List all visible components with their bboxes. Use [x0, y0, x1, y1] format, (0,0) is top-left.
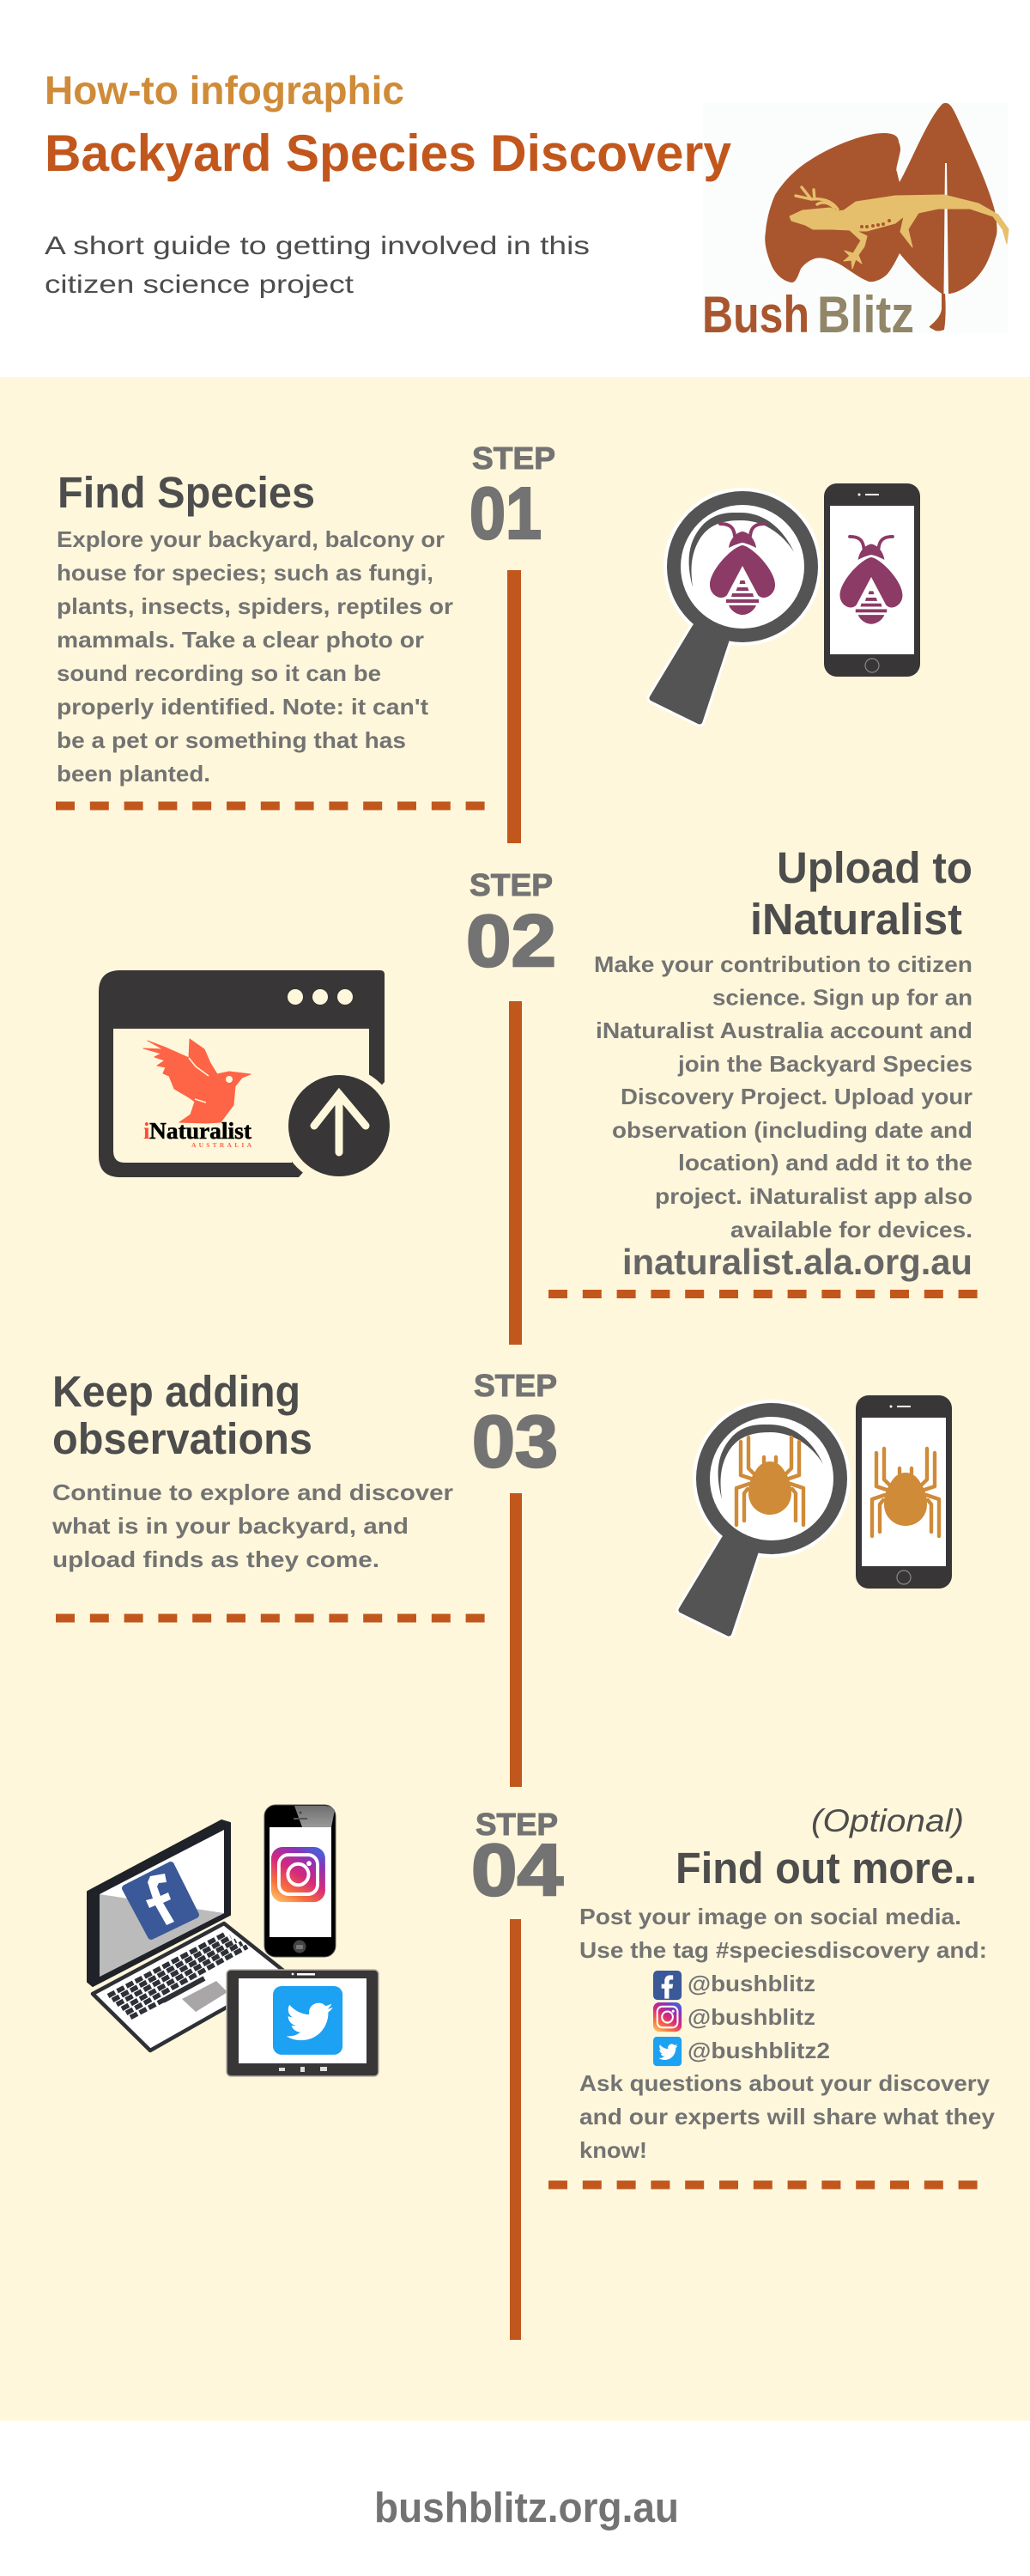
subtitle: citizen science project	[45, 270, 354, 299]
step 1 body text: mammals. Take a clear photo or	[57, 627, 424, 653]
step 2 body text: join the Backyard Species	[677, 1051, 972, 1077]
optional tag: (Optional)	[811, 1803, 964, 1838]
icon: magnifier over insect	[652, 488, 821, 721]
step 2 label: STEP	[470, 867, 553, 902]
step 2 dashed divider	[548, 1290, 978, 1298]
step 1 body text: been planted.	[57, 761, 210, 787]
footer website link: bushblitz.org.au	[374, 2485, 679, 2531]
icon: BushBlitz logo	[702, 103, 1009, 343]
step 1 body text: house for species; such as fungi,	[57, 560, 433, 586]
step 3 body text: what is in your backyard, and	[52, 1513, 409, 1539]
icon: iNaturalist bird logo: i	[143, 1118, 150, 1144]
step 1 body text: plants, insects, spiders, reptiles or	[57, 593, 453, 619]
timeline line: step 3	[510, 1493, 522, 1787]
step 2 body text: project. iNaturalist app also	[655, 1183, 972, 1209]
icon: phone with insect	[824, 483, 920, 677]
icon: iNaturalist bird logo	[143, 1039, 252, 1149]
step 1 body text: properly identified. Note: it can't	[57, 694, 428, 720]
panel: cream background band	[0, 377, 1030, 2421]
step 4 number: 04	[471, 1830, 563, 1911]
header text block	[45, 68, 732, 299]
icon: magnifier over spider	[682, 1400, 851, 1633]
step 2 body text: science. Sign up for an	[712, 985, 972, 1011]
step 4 dashed divider	[548, 2181, 978, 2190]
eyebrow heading: How-to infographic	[45, 68, 404, 112]
step 4 closing text: and our experts will share what they	[579, 2104, 996, 2129]
icon: laptop with facebook	[88, 1820, 287, 2050]
icon: phone with instagram	[264, 1805, 336, 1957]
step 1 dashed divider	[56, 802, 485, 811]
step 2 heading: Upload to	[777, 843, 972, 892]
icon: phone with spider	[856, 1395, 952, 1589]
step 4 label: STEP	[476, 1807, 558, 1842]
step 3 label: STEP	[474, 1368, 557, 1403]
social handle: facebook	[653, 1971, 815, 2000]
icon: iNaturalist bird logo: Naturalist	[149, 1118, 251, 1144]
step 2 body text: available for devices.	[730, 1217, 972, 1242]
step 4 closing text: know!	[579, 2137, 647, 2163]
timeline line: step 2	[509, 1001, 522, 1345]
step 4 intro text: Post your image on social media.	[579, 1904, 961, 1929]
social handle: instagram	[653, 2002, 815, 2032]
social handle: instagram: @bushblitz	[688, 2004, 815, 2030]
step 3 number: 03	[472, 1401, 558, 1483]
step 2 body text: iNaturalist Australia account and	[596, 1018, 972, 1043]
step 1 body text: be a pet or something that has	[57, 727, 406, 753]
icon: iNaturalist bird logo: AUSTRALIA	[191, 1141, 252, 1149]
panel: step 1	[56, 440, 920, 805]
icon: BushBlitz logo: Blitz	[817, 286, 914, 343]
panel: step 3	[52, 1367, 952, 1633]
step 2 heading: iNaturalist	[750, 895, 962, 944]
step 3 body text: Continue to explore and discover	[52, 1479, 453, 1505]
step 2 website link: inaturalist.ala.org.au	[622, 1242, 972, 1282]
subtitle: A short guide to getting involved in this	[45, 232, 590, 260]
step 2 body text: Make your contribution to citizen	[594, 951, 972, 977]
step 1 heading: Find Species	[58, 468, 315, 517]
panel: step 2	[99, 843, 978, 1294]
step 2 number: 02	[466, 901, 556, 982]
step 2 body text: location) and add it to the	[678, 1150, 972, 1176]
timeline line: step 1	[507, 570, 521, 843]
step 1 number: 01	[470, 473, 542, 555]
step 3 body text: upload finds as they come.	[52, 1546, 379, 1572]
social handle: twitter: @bushblitz2	[688, 2038, 830, 2063]
panel: step 4	[88, 1803, 996, 2184]
step 1 body text: Explore your backyard, balcony or	[57, 526, 445, 552]
step 4 closing text: Ask questions about your discovery	[579, 2070, 991, 2096]
step 2 body text: Discovery Project. Upload your	[621, 1084, 972, 1109]
timeline line: step 4	[510, 1919, 521, 2340]
step 3 dashed divider	[56, 1614, 485, 1623]
icon: tablet with twitter	[227, 1970, 379, 2076]
icon: browser window with upload	[99, 970, 398, 1185]
step 1 body text: sound recording so it can be	[57, 660, 381, 686]
step 3 heading: observations	[52, 1414, 312, 1463]
social handle: twitter	[653, 2037, 830, 2066]
step 2 body text: observation (including date and	[612, 1117, 972, 1143]
icon: BushBlitz logo: Bush	[702, 286, 809, 343]
step 4 heading: Find out more..	[676, 1844, 977, 1893]
step 1 label: STEP	[472, 440, 555, 476]
title: Backyard Species Discovery	[45, 125, 732, 182]
step 3 heading: Keep adding	[52, 1367, 300, 1416]
social handle: facebook: @bushblitz	[688, 1971, 815, 1996]
step 4 intro text: Use the tag #speciesdiscovery and:	[579, 1937, 987, 1963]
